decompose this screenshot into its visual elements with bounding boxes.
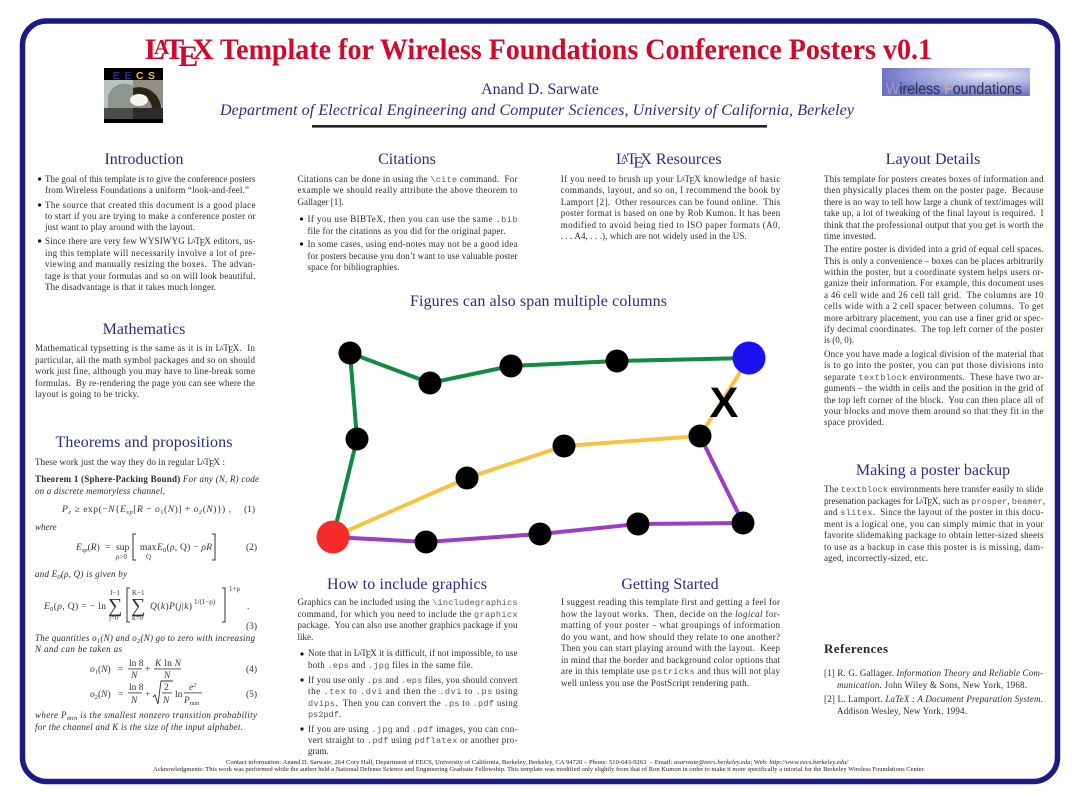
heading: LaTeX Resources: L [616, 151, 626, 168]
marker: broken link X: X [710, 379, 739, 427]
text: graphics body: Graphics can be included using the \includegraphics [298, 597, 518, 608]
text: citations body: file for the citations as you did for the original paper. [308, 226, 506, 236]
equation 5: (5) [246, 689, 257, 700]
equation 2: Q [146, 553, 151, 561]
text: introduction bullets: from Wireless Foundations a uniform “look-and-feel.” [45, 185, 249, 195]
equation 2: E [75, 543, 82, 553]
equation 4: (4) [246, 664, 257, 675]
text: layout details body: a 46 cell wide and 26 cell tall grid. The columns are 10 [824, 290, 1044, 300]
equation 1: 2 [199, 509, 202, 516]
text: layout details body: then physically places them on the poster page. Because [824, 185, 1044, 195]
text: intro sentence: X [213, 457, 220, 467]
heading: Layout Details: Layout Details [886, 151, 980, 168]
text: graphics body: gram. [308, 746, 329, 756]
equation 1: N)] + o [168, 505, 198, 515]
text: layout details body: cells wide with a 2 cell spacer between columns. To get [824, 301, 1044, 311]
equation 1: R − o [137, 505, 160, 515]
heading: References: References [824, 641, 888, 656]
equation 3: 1/(1−ρ) [194, 598, 216, 606]
text: reference 1 [824, 668, 1043, 690]
text: introduction bullets: A [191, 238, 196, 245]
text: and E0 is given by: 0 [57, 574, 61, 581]
text: graphics body: If you are using .jpg and .pdf images, you can con- [308, 724, 518, 735]
text: mathematics body: Mathematical typsetting is the same as it is in L [35, 343, 221, 353]
equation 5: 2 [193, 682, 197, 689]
equation 1 [61, 504, 255, 516]
text: backup body: presenation packages for L [824, 496, 921, 506]
node: source [316, 520, 350, 554]
footer: contact and acknowledgments: Acknowledgments: This work was performed while the author held a National Defense Science and Engineering Graduate Fellowship. This template was modified only slightly from that of Ron Kumon in order to make it more specifically a tutorial for the Berkeley Wireless Foundations Center. [153, 766, 926, 773]
footer: contact and acknowledgments: Contact information: Anand D. Sarwate, 264 Cory Hall, Department of EECS, University of California, Berkeley, Berkeley, CA 94720 – Phone: 510-643-9263 – Email: asarwate@eecs.berkeley.edu ; Web: http://www.eecs.berkeley.edu/ [226, 759, 849, 766]
equation 2: = [105, 543, 110, 553]
text: layout details body: more arbitrary placement, you can use a finer grid or spec- [824, 313, 1044, 323]
equation 3: ρ, Q) = − ln [57, 602, 106, 612]
equation 5: 2 [95, 694, 98, 701]
equation 3: 0 [50, 606, 53, 613]
equation 5: o [90, 690, 95, 700]
heading: Introduction: Introduction [104, 151, 184, 168]
text: citations body: space for bibliographies. [308, 262, 400, 272]
heading: LaTeX Resources: X [640, 151, 652, 168]
text: layout details body: think that the professional output that you get is worth the [824, 220, 1044, 230]
text: resources body: If you need to brush up your L [561, 174, 682, 184]
equation 1: sp [126, 509, 133, 516]
text: backup body: A [919, 498, 924, 505]
equation 3: J−1 [110, 589, 121, 597]
text: layout details body: This is only a convenience – boxes can be places arbitrarily [824, 256, 1044, 266]
heading: LaTeX Resources: Resources [656, 151, 722, 168]
text: quantities: (N) and o [100, 633, 137, 643]
equation 2: (2) [246, 542, 257, 553]
equation 4: N [130, 671, 138, 681]
text: intro sentence: : [222, 457, 225, 467]
text: theorem statement: on a discrete memoryless channel, [35, 486, 165, 496]
text: resources body: Lamport [2]. Other resources can be found online. This [561, 197, 781, 207]
equation 5: N) [101, 690, 111, 700]
text: resources body [561, 174, 781, 241]
text: mathematics body [35, 343, 256, 399]
equation 4: o [90, 665, 95, 675]
text: getting started body: Then you can start playing around with the layout. Keep [561, 643, 780, 653]
text: backup body [824, 484, 1045, 563]
text: reference 2 [824, 694, 1043, 716]
heading: Citations: Citations [378, 151, 436, 168]
equation 2: ρ, Q) − ρR [170, 543, 212, 553]
text: layout details body: separate textblock environments. These have two ar- [824, 372, 1044, 383]
text: resources body: . . . A4, . . .), which are not widely used in the US. [561, 231, 747, 241]
heading: figures: Figures can also span multiple columns [410, 293, 667, 310]
text: introduction bullets [38, 174, 256, 292]
equation 1: (1) [244, 504, 255, 515]
text: backup body: favorite slidemaking package to obtain letter-sized sheets [824, 530, 1044, 540]
text: where Pmin: for the channel and K is the size of the input alphabet. [35, 722, 243, 732]
text: layout details body: The entire poster is divided into a grid of equal cell spaces. [824, 244, 1044, 254]
text: where Pmin: is the smallest nonzero transition probability [78, 710, 257, 720]
text: layout details body: the top left corner of the block. You can then place all of [824, 395, 1044, 405]
equation 1: ( [203, 504, 206, 515]
equation 3: k=0 [132, 614, 143, 622]
panel: Introduction [38, 151, 256, 292]
equation 3: . [247, 602, 249, 612]
text: mathematics body: T [223, 343, 229, 353]
equation 4: K ln N [154, 659, 182, 669]
equation 2: sp [82, 547, 88, 554]
text: layout details body: is to go into the poster, you can put those divisions into [824, 360, 1044, 370]
equation 2: 0 [163, 547, 166, 554]
panel: LaTeX Resources [561, 151, 781, 241]
text: resources body: T [684, 174, 690, 184]
text: quantities: 2 [137, 638, 141, 645]
text: backup body: E [927, 498, 933, 508]
title: A [154, 35, 170, 59]
equation 2: R) [91, 543, 100, 553]
text: introduction bullets: The goal of this template is to give the conference posters [45, 174, 256, 184]
affiliation: Department of Electrical Engineering and Computer Sciences, University of California, Berkeley [219, 102, 855, 119]
equation 5 [90, 681, 257, 707]
text: quantities: N and can be taken as [34, 644, 122, 654]
text: getting started body: well unless you use the PostScript rendering path. [561, 678, 749, 688]
text: layout details body: is (0, 0). [824, 335, 854, 345]
text: reference 2: Addison Wesley, New York, 1994. [837, 706, 967, 716]
text: graphics body: If you use only .ps and .eps files, you should convert [308, 675, 518, 686]
text: introduction bullets: The disadvantage is that it takes much longer. [45, 282, 216, 292]
text: introduction bullets: tage is that your formulas and so on will look beautiful. [45, 271, 256, 281]
text: backup body: The textblock environments here transfer easily to slide [824, 484, 1044, 495]
text: getting started body: do you want, and how should they relate to one another? [561, 632, 780, 642]
text: mathematics body: X [233, 343, 240, 353]
text: intro sentence: A [200, 459, 205, 466]
panel: Figures can also span multiple columns [316, 293, 766, 554]
equation 5: P [183, 696, 190, 706]
text: graphics body: like. [298, 632, 313, 642]
equation 4: + [145, 665, 150, 675]
panel: Making a poster backup [824, 462, 1045, 563]
text: where: where [35, 522, 57, 532]
heading: LaTeX Resources: A [621, 152, 629, 164]
text: quantities: (N) go to zero with increasing [140, 633, 256, 643]
equation 5: + [145, 690, 150, 700]
text: backup body: aged, incorrectly-sized, etc. [824, 553, 928, 563]
chart: network paths [316, 342, 766, 554]
text: layout details body [824, 174, 1044, 427]
nodes: relay points [338, 342, 754, 554]
text: graphics body: both .eps and .jpg files in the same file. [308, 660, 473, 671]
text: resources body: X [694, 174, 701, 184]
equation 2 [75, 534, 257, 561]
text: quantities: 1 [97, 638, 100, 645]
text: mathematics body: . In [240, 343, 255, 353]
equation 3: ( [54, 601, 57, 612]
text: graphics body: vert straight to .pdf using pdflatex or another pro- [308, 735, 518, 746]
equation 1: ≥ exp(− [72, 504, 108, 515]
text: citations body: Citations can be done in using the \cite command. For [298, 174, 518, 185]
text: introduction bullets: Since there are very few WYSIWYG L [45, 236, 193, 246]
text: backup body: X [932, 496, 939, 506]
text: graphics body: E [366, 650, 372, 660]
text: citations body: If you use BIBTeX, then you can use the same .bib [308, 214, 518, 225]
text: introduction bullets: ing this template will necessarily involve a lot of pre- [45, 248, 256, 258]
text: where Pmin: min [67, 715, 77, 722]
text: getting started body: how the layout works. Then, decide on the logical for- [561, 609, 780, 619]
equation 5: ln 8 [129, 683, 144, 693]
text: quantities: The quantities o [35, 633, 97, 643]
heading: Theorems: Theorems and propositions [56, 434, 232, 451]
text: introduction bullets: just want to play around with the layout. [44, 222, 195, 232]
logo: EECS: EE CS [113, 70, 155, 82]
title: T [164, 33, 184, 66]
panel: Mathematics [35, 321, 256, 399]
logo: EECS [104, 68, 163, 123]
text: intro sentence: T [204, 457, 210, 467]
equation 1: ( [164, 504, 167, 515]
text: backup body: and slitex. Since the layout of the poster in this docu- [824, 507, 1044, 518]
text: graphics body: command, for which you need to include the graphicx [298, 609, 518, 620]
text: introduction bullets: editors, us- [213, 236, 256, 246]
text: getting started body [561, 597, 780, 688]
text: layout details body: Once you have made a logical division of the material that [824, 349, 1044, 359]
text: and E0 is given by: and E [35, 569, 57, 579]
panel: Citations [298, 151, 518, 272]
text: introduction bullets: to start if you are trying to make a conference poster or [45, 211, 256, 221]
text: backup body: T [923, 496, 929, 506]
path: green route [333, 353, 749, 537]
equation 5: min [190, 701, 199, 707]
text: graphics body: ps2pdf. [308, 709, 341, 720]
text: mathematics body: E [228, 344, 234, 354]
equation 4: N) [101, 665, 111, 675]
text: layout details body: there is no way to tell how large a chunk of text/images will [824, 197, 1044, 207]
text: layout details body: This template for posters creates boxes of information and [824, 174, 1044, 184]
text: citations body: example we should really attribute the above theorem to [298, 185, 518, 195]
equation 3: ∑ [131, 595, 145, 617]
text: layout details body: space provided. [824, 417, 884, 427]
title: L [145, 33, 165, 66]
title: Template for Wireless Foundations Conference Posters v0.1 [220, 33, 932, 66]
text: theorem statement [35, 474, 259, 496]
equation 5: 2 [164, 683, 169, 693]
equation 4: 1 [95, 669, 98, 676]
equation 3: E [43, 602, 50, 612]
text: graphics body: X [370, 648, 377, 658]
heading: LaTeX Resources: T [627, 151, 637, 168]
text: backup body: , such as prosper, beamer, [938, 496, 1045, 507]
equation 3: (3) [246, 621, 257, 632]
footer: contact and acknowledgments [153, 759, 926, 773]
text: citations body: In some cases, using end-notes may not be a good idea [308, 239, 518, 249]
text: where Pmin: where P [35, 710, 66, 720]
text: resources body: commands, layout, and so on, I recommend the book by [561, 185, 781, 195]
text: layout details body: ganize their information. For example, this document uses [824, 278, 1044, 288]
title: E [178, 40, 198, 73]
equation 1: N{E [108, 505, 126, 515]
equation 1: 1 [160, 509, 163, 516]
text: reference 2: [2] L. Lamport. LaTeX : A Document Preparation System. [824, 694, 1043, 704]
text: graphics body: dvips. Then you can convert the .ps to .pdf using [308, 698, 518, 709]
text: resources body: E [689, 176, 695, 186]
text: mathematics body: particular, all the math symbol packages and so on should [35, 355, 256, 365]
text: graphics body: A [357, 650, 362, 657]
text: where Pmin [35, 710, 257, 732]
heading: Getting Started: Getting Started [621, 576, 719, 593]
equation 2: sup [116, 543, 129, 553]
text: graphics body: package. You can also use another graphics package if you [298, 620, 518, 630]
heading: backup: Making a poster backup [856, 462, 1010, 479]
text: resources body: modified to avoid being tied to ISO paper formats (A0, [561, 220, 780, 230]
node: destination [732, 342, 766, 374]
equation 2: E [156, 543, 163, 553]
text: layout details body: ify decimal coordinates. The top left corner of the poster [824, 324, 1044, 334]
equation 3: K−1 [132, 589, 145, 597]
equation 2: ( [167, 542, 170, 553]
text: getting started body: are in this template use pstricks and thus will not play [561, 666, 780, 677]
equation 3: Q(k)P(j|k) [150, 601, 192, 612]
text: mathematics body: formulas. By re-rendering the page you can see where the [35, 378, 255, 388]
text: resources body: poster format is based on one by Rob Kumon. It has been [561, 208, 781, 218]
text: graphics body: it is difficult, if not impossible, to use [379, 648, 518, 658]
panel: How to include graphics [298, 576, 518, 756]
text: citations body [298, 174, 518, 272]
equation 4: ( [98, 664, 101, 675]
text: introduction bullets: E [200, 238, 206, 248]
author: Anand D. Sarwate [481, 81, 599, 98]
text: reference 1: munication. John Wiley & Sons, New York, 1968. [837, 680, 1027, 690]
text: theorem statement: Theorem 1 (Sphere-Packing Bound) For any (N, R) code [35, 474, 259, 484]
text: getting started body: matting of your poster – what groupings of information [561, 620, 780, 630]
text: mathematics body: layout is going to be tricky. [35, 389, 139, 399]
title: X [192, 33, 214, 66]
equation 3: ∑ [108, 595, 122, 617]
text: introduction bullets: T [195, 236, 201, 246]
equation 3: j=0 [108, 614, 119, 622]
text: introduction bullets: viewing and manually resizing the boxes. The advan- [45, 259, 256, 269]
heading: Mathematics: Mathematics [103, 321, 185, 338]
logo: Wireless Foundations: Wireless Foundations [886, 81, 1022, 98]
equation 1: P [61, 505, 68, 515]
text: graphics body: Note that in L [308, 648, 359, 658]
text: layout details body: your blocks and move them around so that they fit in the [824, 406, 1044, 416]
text: mathematics body: A [219, 345, 224, 352]
text: graphics body: T [361, 648, 367, 658]
equation 4: N [163, 671, 171, 681]
text: introduction bullets: The source that created this document is a good place [45, 200, 255, 210]
path: purple route [333, 436, 743, 542]
logo: Wireless Foundations [882, 68, 1030, 98]
equation 1: N)}) , [206, 505, 231, 515]
equation 5: ( [98, 689, 101, 700]
equation 2: max [140, 543, 157, 553]
equation 1: [ [133, 505, 136, 515]
text: and E0 is given by: (ρ, Q) is given by [61, 569, 127, 579]
text: resources body: knowledge of basic [704, 174, 780, 184]
header rule [312, 125, 767, 128]
equation 5: e [189, 683, 193, 693]
text: introduction bullets: X [204, 236, 211, 246]
equation 2: ρ>0 [116, 553, 127, 561]
text: backup body: ment is a logical one, you can simply mimic that in your [824, 519, 1044, 529]
equation 4: = [118, 665, 123, 675]
text: graphics body: the .tex to .dvi and then the .dvi to .ps using [308, 686, 518, 697]
text: quantities [34, 633, 256, 654]
panel: Getting Started [561, 576, 780, 688]
text: layout details body: guments – the width in cells and the position in the grid of [824, 383, 1044, 393]
text: getting started body: I suggest reading this template first and getting a feel for [561, 597, 780, 607]
heading: graphics: How to include graphics [327, 576, 487, 593]
equation 5: N [130, 696, 138, 706]
text: getting started body: in mind that the border and background color options that [561, 655, 780, 665]
equation 4: ln 8 [129, 659, 144, 669]
text: citations body: Gallager [1]. [298, 197, 343, 207]
equation 3: 1+ρ [229, 585, 240, 593]
text: graphics body [298, 597, 518, 756]
text: intro sentence: These work just the way they do in regular L [35, 457, 202, 467]
panel: Layout Details [824, 151, 1044, 427]
text: backup body: to use as a backup in case this poster is is missing, dam- [824, 542, 1044, 552]
equation 4 [90, 659, 257, 681]
equation 5: N [162, 696, 170, 706]
equation 5: ln [175, 690, 183, 700]
text: layout details body: time invested. [824, 231, 876, 241]
path: yellow route [333, 358, 749, 537]
panel: Theorems and propositions [34, 434, 259, 732]
equation 5: = [118, 690, 123, 700]
heading: LaTeX Resources: E [634, 154, 643, 172]
text: resources body: A [680, 176, 685, 183]
text: layout details body: take up, a lot of tweaking of the final layout is required. I [824, 208, 1044, 218]
equation 3 [43, 585, 257, 632]
equation 1: e [68, 509, 71, 516]
text: mathematics body: work just fine, although you may have to line-break some [35, 366, 255, 376]
text: citations body: for posters because you don’t want to use valuable poster [308, 251, 518, 261]
text: intro sentence: E [209, 458, 215, 468]
text: layout details body: within the poster, but a coordinate system helps users or- [824, 267, 1044, 277]
equation 2: ( [88, 542, 91, 553]
text: reference 1: [1] R. G. Gallager. Information Theory and Reliable Com- [824, 668, 1043, 678]
panel: References [824, 641, 1043, 716]
